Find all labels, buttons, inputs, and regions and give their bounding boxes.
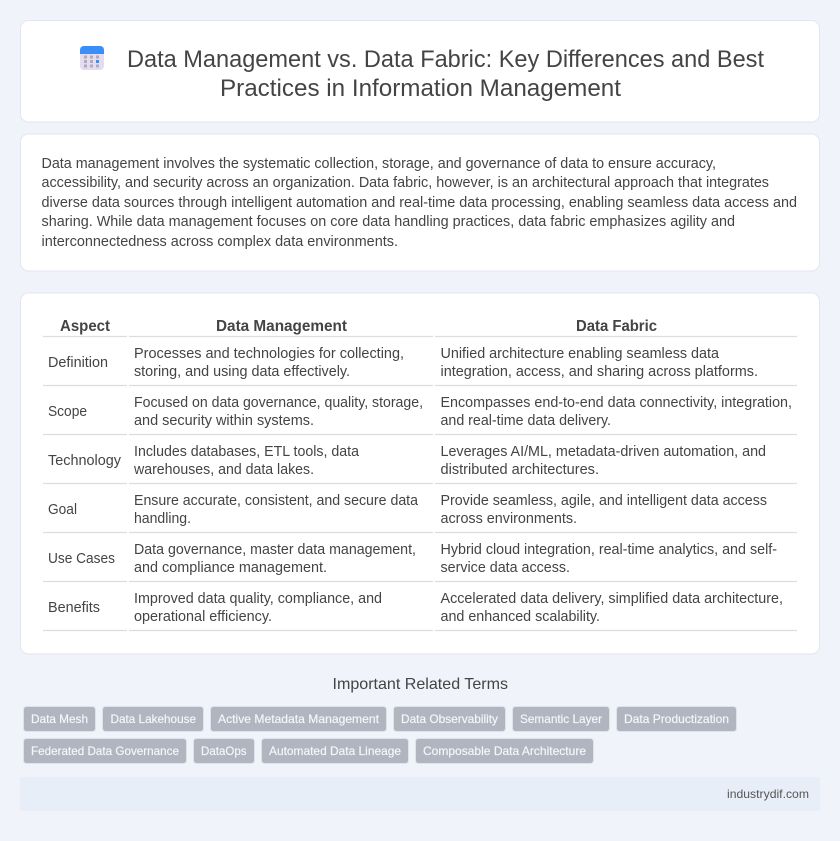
text block: introduction paragraph: interconnectedness across complex data environments. — [42, 234, 398, 250]
table header row: Aspect — [60, 318, 110, 335]
related term tags — [24, 706, 736, 764]
table row: Scope — [43, 395, 797, 434]
title — [127, 46, 764, 102]
table row: Benefits: Benefits — [48, 600, 100, 616]
table header row: Data Fabric — [576, 318, 657, 335]
tag: Automated Data Lineage: Automated Data Lineage — [269, 744, 401, 758]
tag: Data Observability: Data Observability — [401, 712, 498, 726]
tag: Composable Data Architecture: Composable Data Architecture — [423, 744, 586, 758]
tag: Active Metadata Management — [210, 706, 386, 732]
tag: Data Productization — [616, 706, 736, 732]
table row: Goal: handling. — [134, 511, 191, 527]
text block: introduction paragraph: Data management involves the systematic collection, storage, and governance of data to ensure accuracy, — [42, 156, 716, 172]
table row: Benefits: Improved data quality, compliance, and — [134, 591, 382, 607]
table row: Scope: Encompasses end-to-end data connectivity, integration, — [440, 395, 792, 411]
table row: Benefits: and enhanced scalability. — [440, 609, 600, 625]
table row: Definition — [43, 346, 797, 386]
tag: Data Productization: Data Productization — [624, 712, 729, 726]
table header row: Data Management — [216, 318, 347, 335]
tag: DataOps — [194, 738, 254, 764]
tag: Semantic Layer: Semantic Layer — [520, 712, 602, 726]
table header row — [43, 318, 797, 336]
tag: Semantic Layer — [512, 706, 610, 732]
panel: header — [20, 20, 820, 122]
table row: Definition: Unified architecture enabling seamless data — [440, 346, 719, 362]
tag: Data Lakehouse — [102, 706, 204, 732]
table row: Technology: warehouses, and data lakes. — [133, 462, 314, 478]
table row: Benefits — [43, 591, 797, 630]
table row: Technology — [43, 444, 797, 484]
table row: Goal — [43, 493, 797, 532]
footer site name: industrydif.com — [727, 787, 809, 801]
tag: Data Lakehouse: Data Lakehouse — [110, 712, 196, 726]
table row: Goal: Ensure accurate, consistent, and secure data — [134, 493, 418, 509]
title: Data Management vs. Data Fabric: Key Differences and Best — [127, 46, 764, 73]
table row: Definition: integration, access, and sharing across platforms. — [440, 364, 758, 380]
table row: Technology: distributed architectures. — [440, 462, 599, 478]
table row: Use Cases: Data governance, master data management, — [134, 542, 416, 558]
table row: Technology: Leverages AI/ML, metadata-driven automation, and — [440, 444, 766, 460]
table row: Goal: across environments. — [440, 511, 577, 527]
tag: Data Observability — [394, 706, 506, 732]
table row: Technology: Technology — [48, 453, 122, 469]
panel: introduction — [20, 134, 820, 271]
tag: Automated Data Lineage — [262, 738, 408, 764]
table row: Technology: Includes databases, ETL tools, data — [134, 444, 359, 460]
table row: Scope: Scope — [48, 404, 87, 420]
text block: introduction paragraph: accessibility, and security across an organization. Data fabric, however, is an architectural approach that integrates — [42, 175, 769, 191]
tag: Data Mesh: Data Mesh — [31, 712, 88, 726]
table row: Use Cases: Hybrid cloud integration, real-time analytics, and self- — [440, 542, 777, 558]
table row: Use Cases: Use Cases — [48, 551, 115, 567]
tag: Composable Data Architecture — [416, 738, 594, 764]
text block: introduction paragraph: diverse data sources through intelligent automation and real-time data processing, enabling seamless data access and — [42, 195, 797, 211]
tag: DataOps: DataOps — [201, 744, 246, 758]
table row: Scope: Focused on data governance, quality, storage, — [134, 395, 423, 411]
table row: Scope: and real-time data delivery. — [440, 413, 611, 429]
title: Practices in Information Management — [220, 75, 621, 102]
table row: Definition: Processes and technologies for collecting, — [134, 346, 404, 362]
tag: Federated Data Governance — [24, 738, 186, 764]
tag: Active Metadata Management: Active Metadata Management — [218, 712, 380, 726]
tag: Data Mesh — [24, 706, 96, 732]
text block: introduction paragraph: sharing. While data management focuses on core data handling practices, data fabric emphasizes agility and — [42, 214, 735, 230]
panel: comparison table — [20, 293, 820, 654]
table row: Benefits: operational efficiency. — [134, 609, 272, 625]
table row: Scope: and security within systems. — [134, 413, 314, 429]
table row: Use Cases — [43, 542, 797, 582]
footer bar — [20, 777, 820, 811]
heading: important related terms: Important Related Terms — [332, 676, 508, 693]
table row: Use Cases: service data access. — [440, 560, 570, 576]
table row: Use Cases: and compliance management. — [134, 560, 327, 576]
table row: Benefits: Accelerated data delivery, simplified data architecture, — [440, 591, 783, 607]
icon: calendar grid — [80, 46, 104, 70]
table row: Goal: Provide seamless, agile, and intelligent data access — [440, 493, 767, 509]
text block: introduction paragraph — [42, 156, 797, 250]
table row: Goal: Goal — [48, 502, 77, 518]
table row: Definition: Definition — [48, 355, 108, 371]
tag: Federated Data Governance: Federated Data Governance — [31, 744, 179, 758]
table row: Definition: storing, and using data effectively. — [134, 364, 350, 380]
